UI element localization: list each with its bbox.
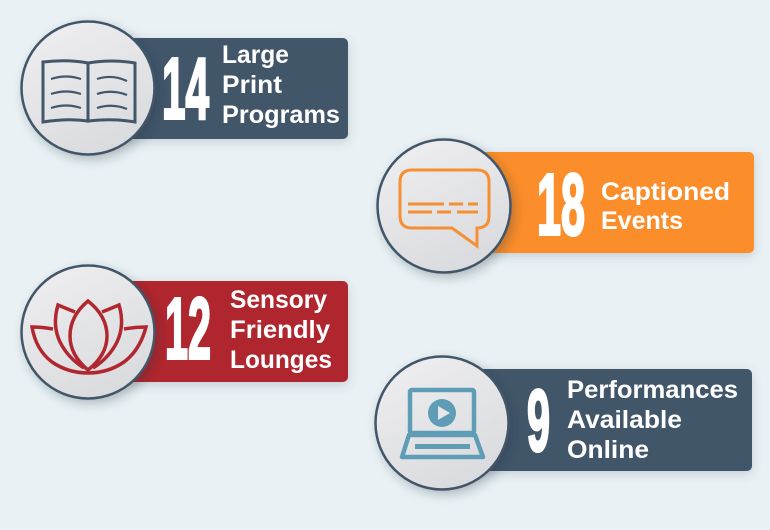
label: large print programs: Print bbox=[222, 71, 283, 99]
panel: performances available online bbox=[376, 356, 752, 490]
panel background: large print bbox=[100, 38, 348, 139]
panel: large print programs: 14 bbox=[162, 40, 209, 138]
panel: performances available online: 9 bbox=[527, 372, 550, 470]
label: sensory friendly lounges bbox=[230, 286, 332, 374]
label: performances available online: Online bbox=[567, 436, 649, 464]
circle badge: captioned bbox=[378, 140, 510, 272]
icon: open book bbox=[43, 61, 135, 122]
circle badge: sensory bbox=[22, 266, 154, 398]
label: performances available online bbox=[567, 376, 738, 464]
label: large print programs bbox=[222, 41, 340, 129]
label: performances available online: Performances bbox=[567, 376, 738, 404]
panel background: sensory bbox=[100, 281, 348, 382]
label: large print programs: Programs bbox=[222, 101, 340, 129]
label: sensory friendly lounges: Sensory bbox=[230, 286, 327, 314]
label: large print programs: Large bbox=[222, 41, 289, 69]
icon: lotus bbox=[32, 301, 146, 373]
label: captioned events: Events bbox=[601, 207, 683, 235]
label: sensory friendly lounges: Friendly bbox=[230, 316, 330, 344]
panel: captioned events bbox=[378, 140, 754, 272]
panel background: captioned bbox=[460, 152, 754, 253]
panel background: performances bbox=[460, 369, 752, 471]
icon: laptop with play button bbox=[402, 390, 483, 457]
panel: captioned events: 18 bbox=[537, 156, 585, 254]
panel: large print programs bbox=[22, 22, 348, 154]
circle badge: performances bbox=[376, 356, 508, 490]
label: sensory friendly lounges: Lounges bbox=[230, 346, 332, 374]
label: performances available online: Available bbox=[567, 406, 682, 434]
panel: sensory friendly lounges: 12 bbox=[165, 280, 211, 378]
label: captioned events bbox=[601, 178, 730, 235]
panel: sensory friendly lounges bbox=[22, 266, 348, 398]
label: captioned events: Captioned bbox=[601, 178, 730, 206]
icon: speech bubble bbox=[400, 170, 489, 246]
circle badge: large print bbox=[22, 22, 154, 154]
